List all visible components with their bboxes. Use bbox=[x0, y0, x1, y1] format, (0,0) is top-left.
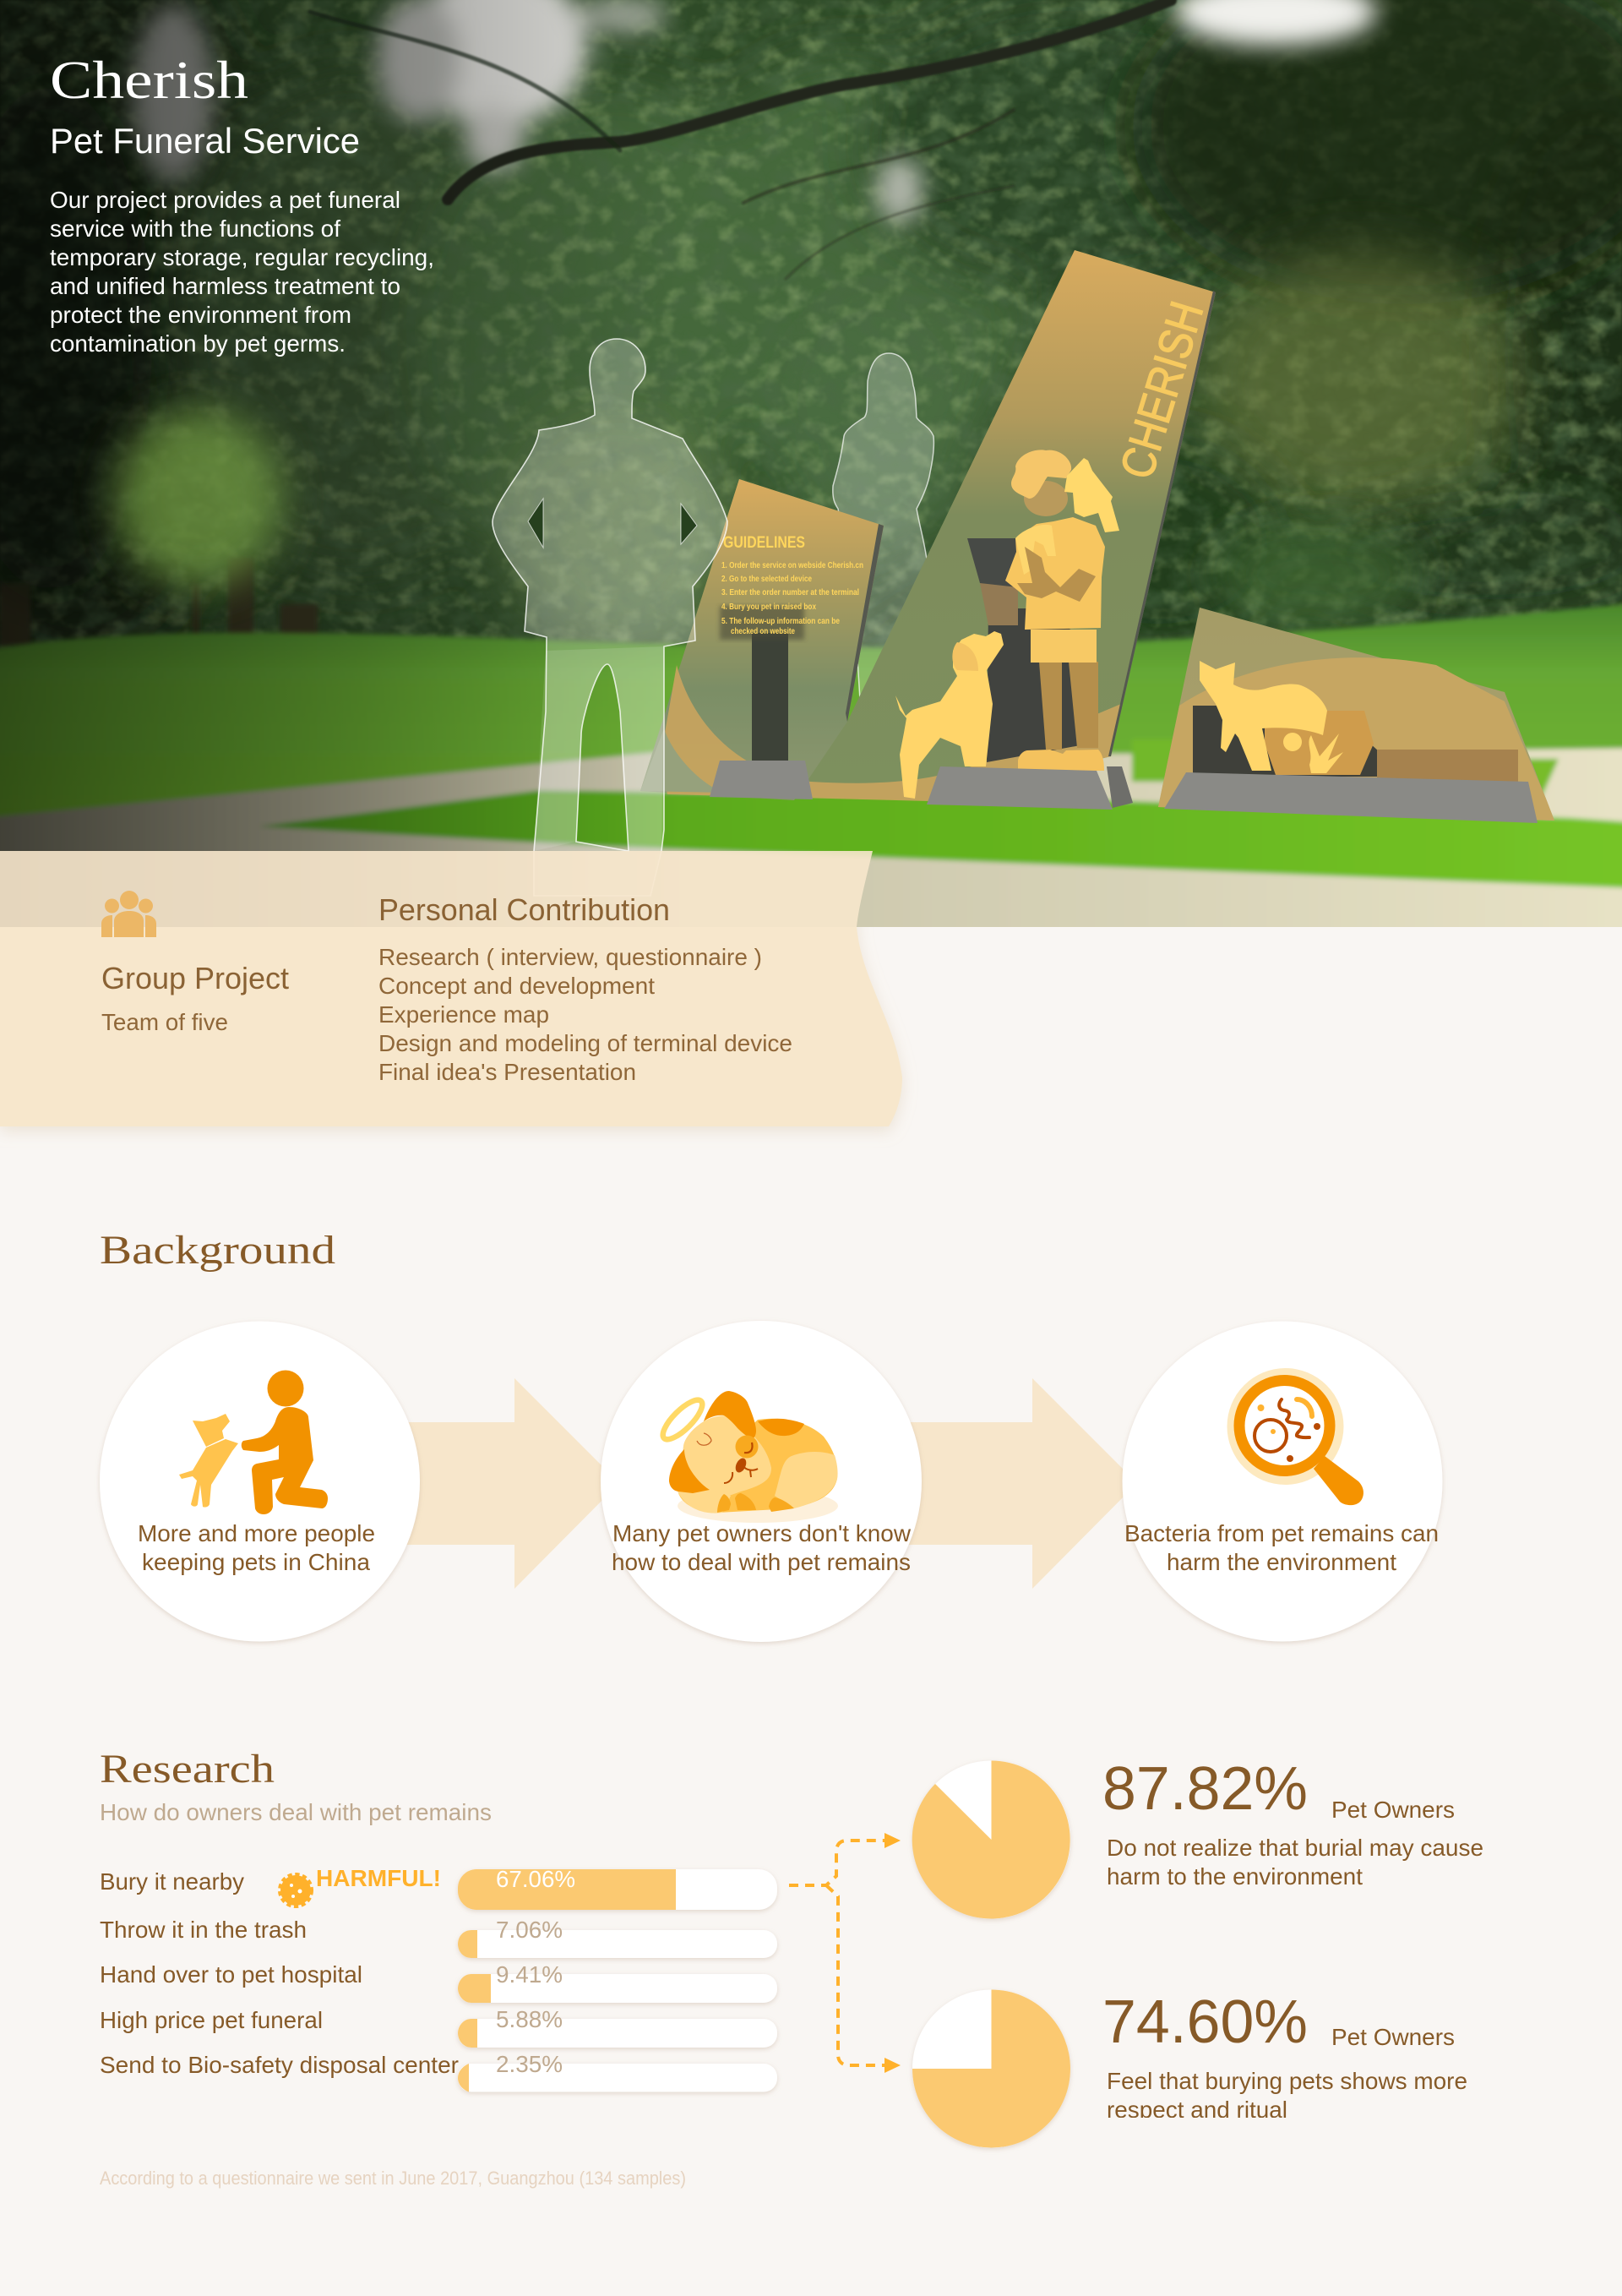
subtitle: research question: How do owners deal with pet remains bbox=[100, 1799, 492, 1825]
bar row: pet funeral: 5.88% bbox=[496, 2006, 563, 2032]
intro text: service with the functions of bbox=[50, 215, 340, 242]
intro text: Our project provides a pet funeral bbox=[50, 187, 400, 213]
text: guidelines: checked on website bbox=[731, 627, 795, 636]
pie chart: 74.60% bbox=[912, 1989, 1070, 2148]
concrete bases bbox=[710, 761, 1538, 823]
tonal tree masses bbox=[0, 0, 1622, 625]
text: keeping pets bbox=[138, 1520, 375, 1575]
text: keeping pets: More and more people bbox=[138, 1520, 375, 1546]
stat: 87.82% bbox=[1102, 1755, 1483, 1890]
woman silhouette bbox=[833, 353, 933, 727]
edge shading bbox=[846, 291, 1216, 756]
text: guidelines: 3. Enter the order number at the terminal bbox=[721, 588, 859, 597]
light green tree bbox=[114, 410, 283, 587]
intro text: protect the environment from bbox=[50, 302, 351, 328]
stat: 74.60%: respect and ritual bbox=[1107, 2097, 1287, 2123]
orange swoosh bbox=[664, 665, 1121, 801]
dog paws bbox=[717, 1493, 794, 1513]
bar row: bio-safety center: Send to Bio-safety disposal center bbox=[100, 2052, 459, 2078]
intro text: temporary storage, regular recycling, bbox=[50, 244, 434, 270]
dark vignette on the left bbox=[0, 0, 628, 851]
intro text: contamination by pet germs. bbox=[50, 330, 346, 357]
heading: research: Research bbox=[100, 1747, 275, 1792]
bar row: throw in the trash: 7.06% bbox=[496, 1917, 563, 1943]
harmful warning bbox=[280, 1865, 441, 1906]
text: keeping pets: keeping pets in China bbox=[142, 1549, 370, 1575]
text: contribution list: Concept and development bbox=[378, 973, 655, 999]
text: guidelines: 1. Order the service on webside Cherish.cn bbox=[721, 561, 863, 570]
dog figure bbox=[895, 631, 1004, 799]
info panel: group project and personal contribution bbox=[0, 851, 902, 1126]
board smudge bbox=[720, 606, 804, 640]
text: team size: Team of five bbox=[101, 1009, 228, 1035]
heading: personal contribution: Personal Contribution bbox=[378, 892, 670, 927]
harmful warning: HARMFUL! bbox=[316, 1865, 441, 1891]
CHERISH lettering: CHERISH bbox=[1109, 295, 1213, 485]
bar row: throw in the trash bbox=[100, 1917, 777, 1958]
bar row: bury it nearby: Bury it nearby bbox=[100, 1868, 244, 1895]
icon: halo bbox=[657, 1394, 708, 1445]
lawn and paths bbox=[0, 602, 1622, 927]
bar row: pet funeral bbox=[100, 2006, 777, 2048]
text: guidelines: 4. Bury you pet in raised box bbox=[721, 603, 816, 612]
icon: sleeping angel dog bbox=[657, 1391, 838, 1523]
text: guidelines bbox=[721, 534, 863, 636]
icon: person and dog bbox=[179, 1371, 328, 1514]
icon: group of people bbox=[101, 891, 156, 937]
branches bbox=[310, 0, 1171, 279]
installation: right panel with cat bbox=[1158, 608, 1554, 821]
bar row: pet funeral: High price pet funeral bbox=[100, 2007, 323, 2033]
text: guidelines: 5. The follow-up information can be bbox=[721, 617, 840, 626]
card: bacteria harm environment bbox=[1122, 1322, 1443, 1641]
text: guidelines: GUIDELINES bbox=[723, 534, 805, 552]
text: owners unsure: Many pet owners don't know bbox=[612, 1520, 912, 1546]
bar row: pet hospital bbox=[100, 1961, 777, 2003]
subtitle: Pet Funeral Service bbox=[50, 121, 360, 161]
text: owners unsure: how to deal with pet remains bbox=[612, 1549, 911, 1575]
bar row: bio-safety center bbox=[100, 2051, 777, 2092]
card: owners unsure about remains bbox=[601, 1321, 922, 1642]
bar row: bury it nearby bbox=[100, 1866, 777, 1910]
heading: group project: Group Project bbox=[101, 961, 289, 995]
bar row: pet hospital: 9.41% bbox=[496, 1961, 563, 1988]
pie chart: 87.82% bbox=[912, 1761, 1070, 1918]
stat: 74.60%: Pet Owners bbox=[1331, 2024, 1455, 2050]
hero photo: installation in a park bbox=[0, 0, 1622, 963]
bar row: bury it nearby: 67.06% bbox=[496, 1866, 575, 1892]
dark post rectangles bbox=[752, 633, 788, 761]
text: contribution list: Final idea's Presentation bbox=[378, 1059, 636, 1085]
stat: 87.82%: Do not realize that burial may cause bbox=[1107, 1835, 1483, 1861]
arrow: first to second bbox=[406, 1378, 619, 1589]
bar row: bio-safety center: 2.35% bbox=[496, 2051, 563, 2077]
icon: germ gear bbox=[280, 1875, 311, 1906]
bar row: throw in the trash: Throw it in the trash bbox=[100, 1917, 307, 1943]
text: bacteria bbox=[1124, 1520, 1439, 1575]
fish bowl bbox=[1265, 711, 1374, 775]
man silhouette bbox=[493, 339, 727, 896]
installation: left and main panels bbox=[640, 250, 1216, 801]
text: bacteria: Bacteria from pet remains can bbox=[1124, 1520, 1439, 1546]
stat: 87.82%: 87.82% bbox=[1102, 1755, 1308, 1823]
card: more people keeping pets bbox=[100, 1322, 420, 1641]
bar chart: disposal methods bbox=[100, 1865, 777, 2092]
stat: 87.82%: Pet Owners bbox=[1331, 1797, 1455, 1823]
text: contribution list: Research ( interview, questionnaire ) bbox=[378, 944, 762, 970]
bird bbox=[1064, 458, 1119, 532]
stat: 87.82%: harm to the environment bbox=[1107, 1863, 1363, 1890]
text: contribution list bbox=[378, 944, 792, 1085]
text: bacteria: harm the environment bbox=[1167, 1549, 1396, 1575]
text: contribution list: Experience map bbox=[378, 1001, 549, 1028]
title: Cherish bbox=[50, 50, 248, 110]
stat: 74.60%: Feel that burying pets shows more bbox=[1107, 2068, 1467, 2094]
sky patches bbox=[133, 0, 1377, 224]
intro text: and unified harmless treatment to bbox=[50, 273, 400, 299]
dashed connector arrows bbox=[789, 1833, 901, 2073]
girl figure bbox=[1005, 450, 1119, 771]
cat figure bbox=[1200, 661, 1327, 771]
tree trunks bbox=[2, 564, 318, 646]
heading: background: Background bbox=[100, 1228, 335, 1273]
arrow: second to third bbox=[908, 1378, 1137, 1589]
text: contribution list: Design and modeling of terminal device bbox=[378, 1030, 792, 1056]
footnote: According to a questionnaire we sent in June 2017, Guangzhou (134 samples) bbox=[100, 2168, 686, 2189]
foliage texture bbox=[0, 0, 1622, 651]
stat: 74.60% bbox=[1102, 1988, 1467, 2123]
text: owners unsure bbox=[612, 1520, 912, 1575]
text: guidelines: 2. Go to the selected device bbox=[721, 575, 812, 584]
stat: 74.60%: 74.60% bbox=[1102, 1988, 1308, 2056]
icon: magnifier with bacteria bbox=[1227, 1368, 1363, 1505]
intro text bbox=[50, 187, 434, 357]
bar row: pet hospital: Hand over to pet hospital bbox=[100, 1961, 362, 1988]
